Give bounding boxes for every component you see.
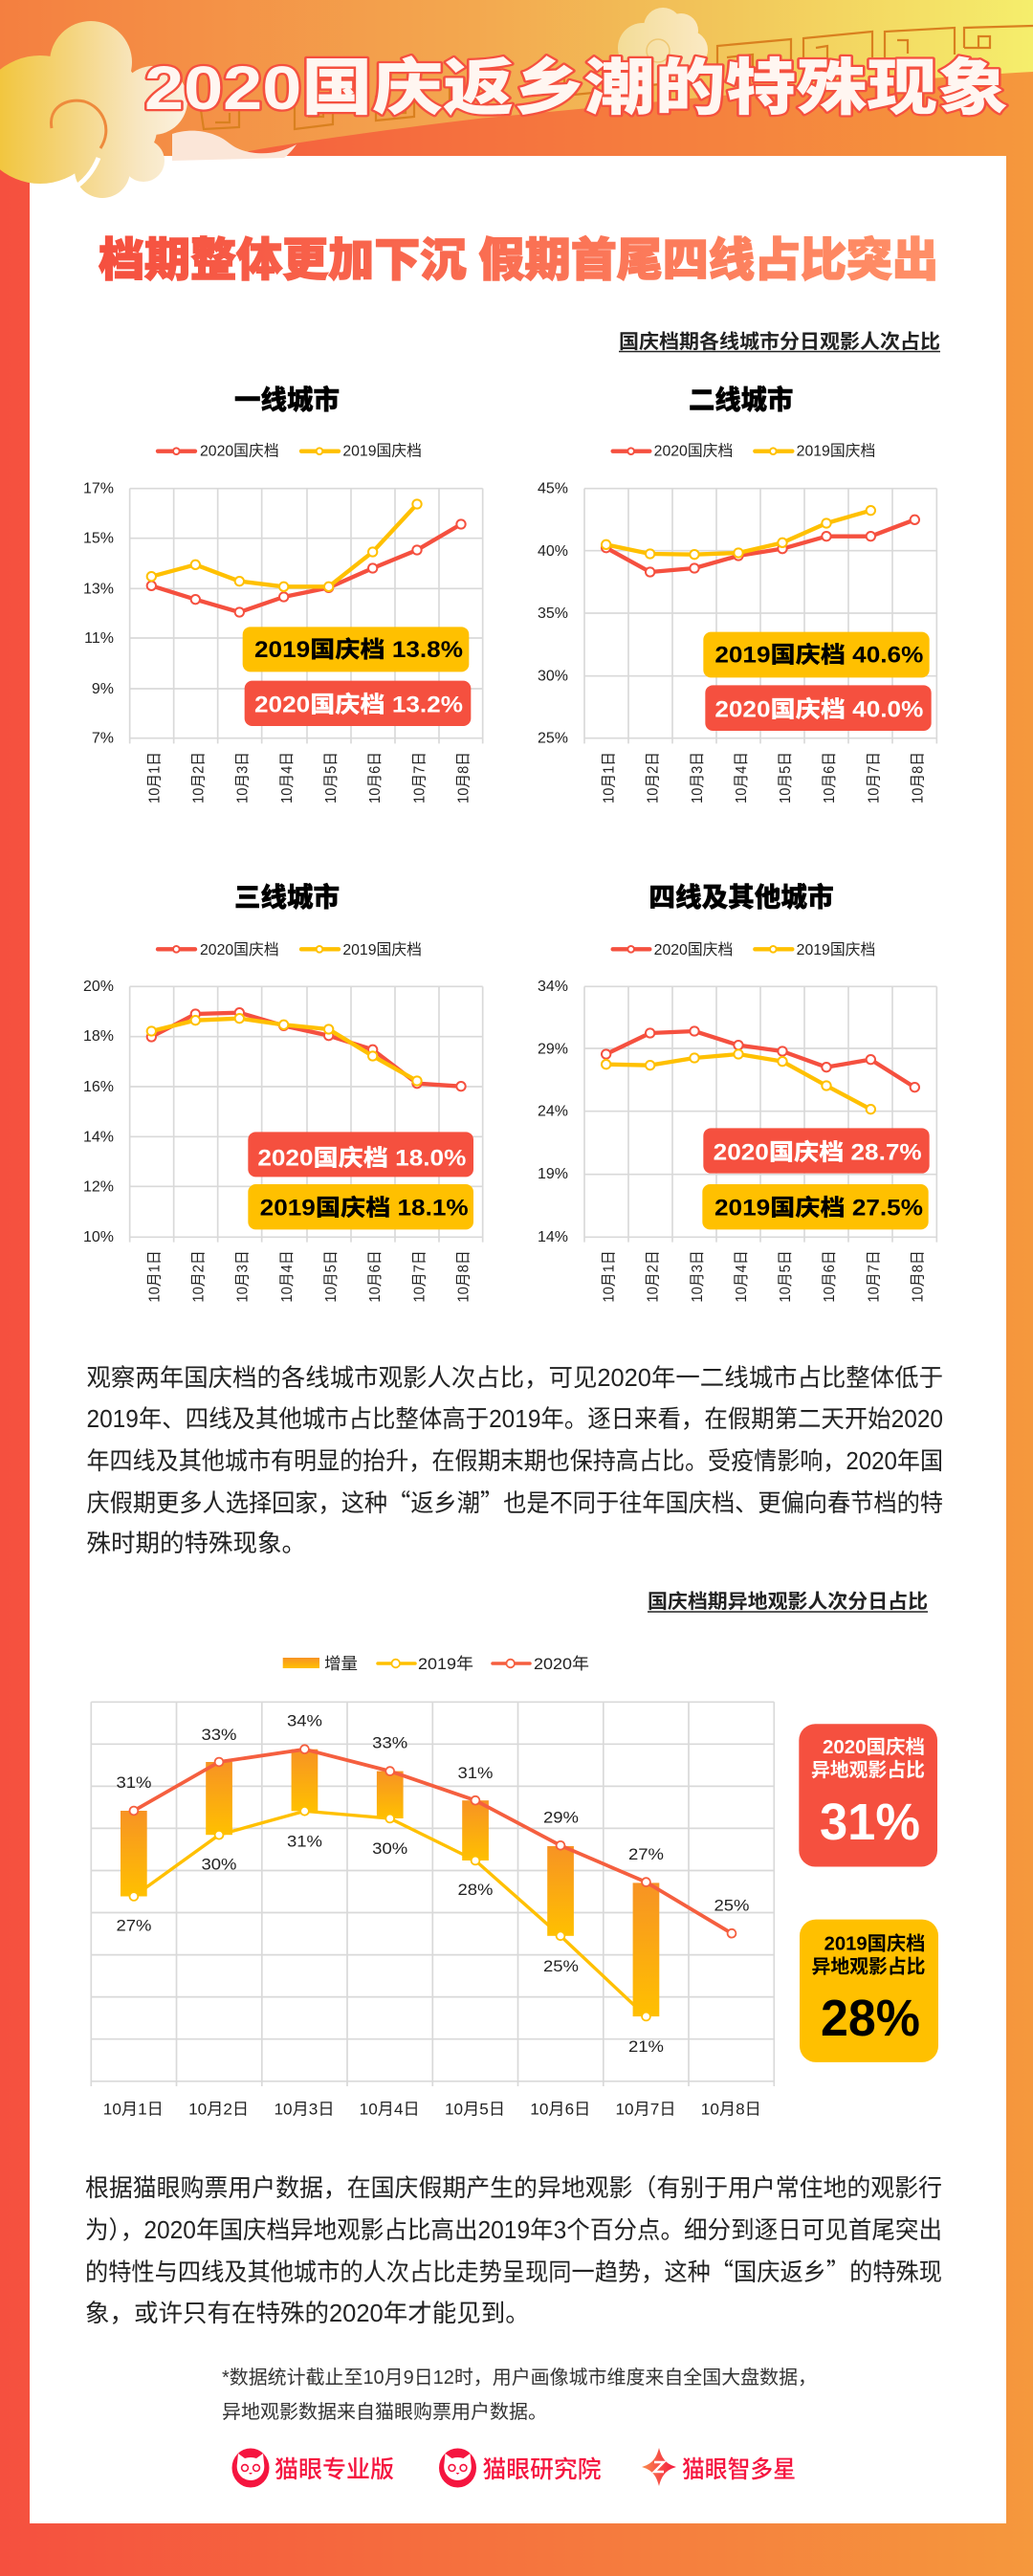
white crescent — [72, 158, 99, 189]
chart title: 三线城市 — [234, 881, 340, 912]
x axis labels: 10月3日 — [235, 1250, 252, 1303]
legend: 2019国庆档 — [797, 443, 875, 460]
y axis labels — [538, 979, 568, 1245]
x axis labels: 10月8日 — [456, 1250, 473, 1303]
x axis labels: 10月6日 — [822, 752, 838, 804]
y axis labels: 19% — [538, 1166, 568, 1182]
card: 2019 out-of-town share: 28% — [821, 1990, 920, 2047]
x axis labels: 10月7日 — [411, 752, 428, 804]
x axis labels: 10月1日 — [103, 2101, 164, 2118]
2019 data labels: 31% — [287, 1833, 322, 1850]
x axis labels: 10月4日 — [360, 2101, 420, 2118]
x axis labels — [147, 1250, 473, 1303]
2019 series — [602, 506, 875, 559]
x axis labels: 10月7日 — [411, 1250, 428, 1303]
2019 markers — [130, 1807, 650, 2020]
y axis labels: 11% — [84, 630, 114, 647]
x axis labels: 10月6日 — [822, 1250, 838, 1303]
x axis labels: 10月1日 — [147, 1250, 164, 1303]
x axis labels: 10月5日 — [445, 2101, 505, 2118]
legend: 2019国庆档 — [797, 941, 875, 958]
footnote: 异地观影数据来自猫眼购票用户数据。 — [222, 2401, 547, 2423]
x axis labels: 10月1日 — [602, 752, 618, 804]
y axis labels — [538, 480, 568, 747]
paragraph: city tier analysis: 2019年、四线及其他城市占比整体高于2019年。逐日来看，在假期第二天开始2020 — [86, 1406, 943, 1433]
2020 series — [602, 1026, 919, 1091]
y axis labels: 10% — [83, 1229, 114, 1245]
2019 data labels: 30% — [372, 1839, 407, 1858]
tail — [172, 131, 297, 161]
x axis labels: 10月8日 — [910, 752, 926, 804]
legend — [158, 443, 422, 460]
2019 data labels: 27% — [117, 1917, 151, 1934]
y axis labels: 34% — [538, 979, 568, 995]
2019 series — [602, 1049, 875, 1113]
x axis labels: 10月2日 — [191, 752, 208, 804]
left cloud — [0, 21, 297, 198]
y axis labels: 30% — [538, 669, 568, 685]
y axis labels: 14% — [83, 1129, 114, 1145]
callout 2019: 2019国庆档 18.1% — [260, 1194, 469, 1221]
x axis labels: 10月8日 — [701, 2101, 761, 2118]
y axis labels: 29% — [538, 1041, 568, 1057]
card: 2019 out-of-town share: 异地观影占比 — [811, 1955, 926, 1978]
x axis labels: 10月7日 — [866, 1250, 882, 1303]
card: 2019 out-of-town share: 2019国庆档 — [824, 1932, 925, 1955]
icon: cat face — [439, 2449, 476, 2487]
2020 data labels: 25% — [714, 1896, 750, 1915]
x axis labels: 10月7日 — [866, 752, 882, 804]
x axis labels: 10月2日 — [646, 752, 662, 804]
y axis labels — [83, 979, 114, 1245]
card: 2020 out-of-town share: 2020国庆档 — [823, 1736, 925, 1758]
x axis labels: 10月1日 — [147, 752, 164, 804]
2020 series — [147, 519, 466, 617]
logo: 猫眼智多星 — [642, 2448, 796, 2486]
x axis labels: 10月2日 — [188, 2101, 249, 2118]
cloud lobes — [0, 21, 187, 198]
card: 2020 out-of-town share: 31% — [820, 1794, 920, 1851]
x axis labels — [602, 752, 926, 804]
x axis labels: 10月4日 — [734, 752, 750, 804]
panel: tier 3 cities chart — [83, 881, 483, 1303]
x axis labels: 10月5日 — [323, 1250, 340, 1303]
legend: 2020国庆档 — [654, 443, 733, 460]
y axis labels: 9% — [92, 681, 114, 697]
y axis labels: 45% — [538, 480, 568, 496]
2019 series — [147, 499, 422, 591]
footnote — [222, 2367, 817, 2423]
logo: 猫眼智多星: 猫眼智多星 — [682, 2456, 796, 2483]
2019 data labels: 25% — [543, 1957, 579, 1975]
x axis labels — [103, 2101, 761, 2118]
callout 2019 — [703, 632, 930, 677]
card: 2020 out-of-town share: 异地观影占比 — [811, 1759, 925, 1781]
legend: 2019年 — [418, 1655, 473, 1673]
legend: 2020国庆档 — [654, 941, 733, 958]
y axis labels: 15% — [83, 531, 114, 547]
x axis labels: 10月5日 — [323, 752, 340, 804]
x axis labels: 10月2日 — [191, 1250, 208, 1303]
x axis labels: 10月2日 — [646, 1250, 662, 1303]
paragraph: city tier analysis: 殊时期的特殊现象。 — [86, 1530, 306, 1557]
y axis labels: 20% — [83, 979, 114, 995]
2020 line — [134, 1750, 732, 1933]
icon: four-point star — [642, 2448, 676, 2486]
paragraph: city tier analysis: 观察两年国庆档的各线城市观影人次占比，可见2020年一二线城市占比整体低于 — [86, 1365, 943, 1392]
x axis labels: 10月6日 — [367, 1250, 384, 1303]
2020 data labels: 31% — [457, 1764, 494, 1782]
2020 data labels: 29% — [543, 1808, 579, 1827]
legend — [158, 941, 422, 958]
y axis labels: 13% — [83, 581, 114, 597]
right cloud — [618, 8, 708, 86]
yellow diagonal band — [0, 0, 1033, 165]
callout 2020 — [705, 685, 932, 731]
header banner artwork — [0, 0, 1033, 165]
legend — [613, 443, 875, 460]
legend: 2020国庆档 — [200, 443, 279, 460]
x axis labels: 10月8日 — [456, 752, 473, 804]
paragraph: out-of-town viewing analysis: 象，或许只有在特殊的2020年才能见到。 — [85, 2301, 530, 2327]
callout 2020: 2020国庆档 18.0% — [257, 1145, 466, 1172]
2019 data labels — [117, 1833, 664, 2056]
x axis labels: 10月1日 — [602, 1250, 618, 1303]
x axis labels: 10月3日 — [235, 752, 252, 804]
right cloud swirl — [647, 39, 670, 62]
subheading: 档期整体更加下沉 假期首尾四线占比突出 — [99, 235, 938, 286]
2019 data labels: 28% — [457, 1881, 494, 1899]
panel: tier 2 cities chart — [538, 384, 936, 804]
callout 2020 — [703, 1128, 930, 1174]
x axis labels: 10月7日 — [616, 2101, 675, 2118]
icon: cat face — [231, 2449, 270, 2487]
2019 series — [147, 1014, 422, 1086]
callout 2020: 2020国庆档 13.2% — [254, 692, 463, 718]
section label: city tiers: 国庆档期各线城市分日观影人次占比 — [619, 330, 940, 353]
x axis labels: 10月4日 — [279, 752, 296, 804]
legend: 2019国庆档 — [342, 443, 422, 460]
x axis labels: 10月6日 — [367, 752, 384, 804]
panel: out-of-town viewing chart — [91, 1655, 774, 2118]
y axis labels: 25% — [538, 731, 568, 747]
callout 2020: 2020国庆档 40.0% — [714, 695, 923, 722]
section label: out-of-town viewing: 国庆档期异地观影人次分日占比 — [648, 1591, 928, 1613]
card: 2020 out-of-town share — [799, 1724, 937, 1867]
panel: tier 1 cities chart — [83, 384, 483, 804]
callout 2019 — [243, 627, 469, 672]
callout 2019: 2019国庆档 27.5% — [714, 1194, 923, 1221]
legend: 增量 — [324, 1655, 358, 1673]
2020 markers — [130, 1745, 736, 1938]
2020 data labels: 31% — [117, 1773, 151, 1792]
2020 data labels — [117, 1712, 750, 1915]
logo: 猫眼研究院: 猫眼研究院 — [482, 2456, 601, 2483]
y axis labels — [83, 480, 114, 747]
y axis labels: 40% — [538, 543, 568, 560]
legend: 2020国庆档 — [200, 941, 279, 958]
logo: 猫眼专业版 — [231, 2449, 394, 2487]
x axis labels: 10月4日 — [734, 1250, 750, 1303]
y axis labels: 24% — [538, 1104, 568, 1120]
x axis labels: 10月4日 — [279, 1250, 296, 1303]
x axis labels: 10月6日 — [530, 2101, 590, 2118]
card: 2019 out-of-town share — [800, 1920, 938, 2062]
2020 data labels: 33% — [201, 1726, 237, 1744]
callout 2019 — [248, 1184, 473, 1229]
2020 series — [147, 1008, 466, 1090]
2019 data labels: 30% — [201, 1856, 237, 1873]
x axis labels: 10月8日 — [910, 1250, 926, 1303]
2019 line — [134, 1811, 646, 2016]
fret pattern — [201, 26, 1033, 129]
paragraph: out-of-town viewing analysis: 根据猫眼购票用户数据，在国庆假期产生的异地观影（有别于用户常住地的观影行 — [85, 2175, 942, 2202]
increase bars — [121, 1750, 659, 2016]
callout 2020 — [248, 1132, 473, 1177]
callout 2019: 2019国庆档 40.6% — [714, 642, 923, 669]
2020 data labels: 33% — [372, 1733, 407, 1752]
x axis labels: 10月5日 — [778, 1250, 794, 1303]
y axis labels: 16% — [83, 1079, 114, 1095]
x axis labels: 10月3日 — [690, 1250, 706, 1303]
2020 series — [602, 516, 919, 577]
y axis labels: 14% — [538, 1229, 568, 1245]
x axis labels — [602, 1250, 926, 1303]
chart title: 一线城市 — [234, 384, 340, 414]
paragraph: out-of-town viewing analysis: 的特性与四线及其他城市的人次占比走势呈现同一趋势，这种“国庆返乡”的特殊现 — [85, 2253, 942, 2288]
y axis labels: 12% — [83, 1178, 114, 1195]
y axis labels: 7% — [92, 731, 114, 747]
paragraph: out-of-town viewing analysis — [85, 2175, 942, 2327]
callout 2020: 2020国庆档 28.7% — [714, 1139, 922, 1166]
paragraph: city tier analysis: 庆假期更多人选择回家，这种“返乡潮”也是不同于往年国庆档、更偏向春节档的特 — [86, 1484, 943, 1519]
paragraph: out-of-town viewing analysis: 为），2020年国庆档异地观影占比高出2019年3个百分点。细分到逐日可见首尾突出 — [85, 2217, 942, 2244]
paragraph: city tier analysis: 年四线及其他城市有明显的抬升，在假期末期也保持高占比。受疫情影响，2020年国 — [86, 1448, 943, 1475]
2019 data labels: 21% — [628, 2037, 664, 2056]
logo: 猫眼专业版: 猫眼专业版 — [275, 2456, 394, 2483]
x axis labels: 10月5日 — [778, 752, 794, 804]
y axis labels: 17% — [83, 480, 114, 496]
legend — [283, 1655, 589, 1673]
panel: tier 4 and other cities chart — [538, 881, 936, 1303]
x axis labels: 10月3日 — [690, 752, 706, 804]
x axis labels: 10月3日 — [274, 2101, 335, 2118]
2020 data labels: 27% — [628, 1845, 664, 1863]
2020 data labels: 34% — [287, 1712, 322, 1729]
footnote: *数据统计截止至10月9日12时，用户画像城市维度来自全国大盘数据， — [222, 2367, 817, 2389]
paragraph: city tier analysis — [86, 1365, 943, 1557]
legend: 2020年 — [534, 1655, 589, 1673]
y axis labels: 35% — [538, 605, 568, 622]
legend — [613, 941, 875, 958]
legend: 2019国庆档 — [342, 941, 422, 958]
title: 2020国庆返乡潮的特殊现象 — [144, 54, 1008, 122]
chart title: 二线城市 — [689, 384, 793, 414]
swirl — [51, 100, 106, 148]
callout 2019 — [702, 1184, 929, 1229]
x axis labels — [147, 752, 473, 804]
chart title: 四线及其他城市 — [648, 881, 834, 912]
callout 2020 — [245, 681, 471, 726]
logo: 猫眼研究院 — [439, 2449, 601, 2487]
callout 2019: 2019国庆档 13.8% — [254, 636, 463, 663]
y axis labels: 18% — [83, 1028, 114, 1045]
